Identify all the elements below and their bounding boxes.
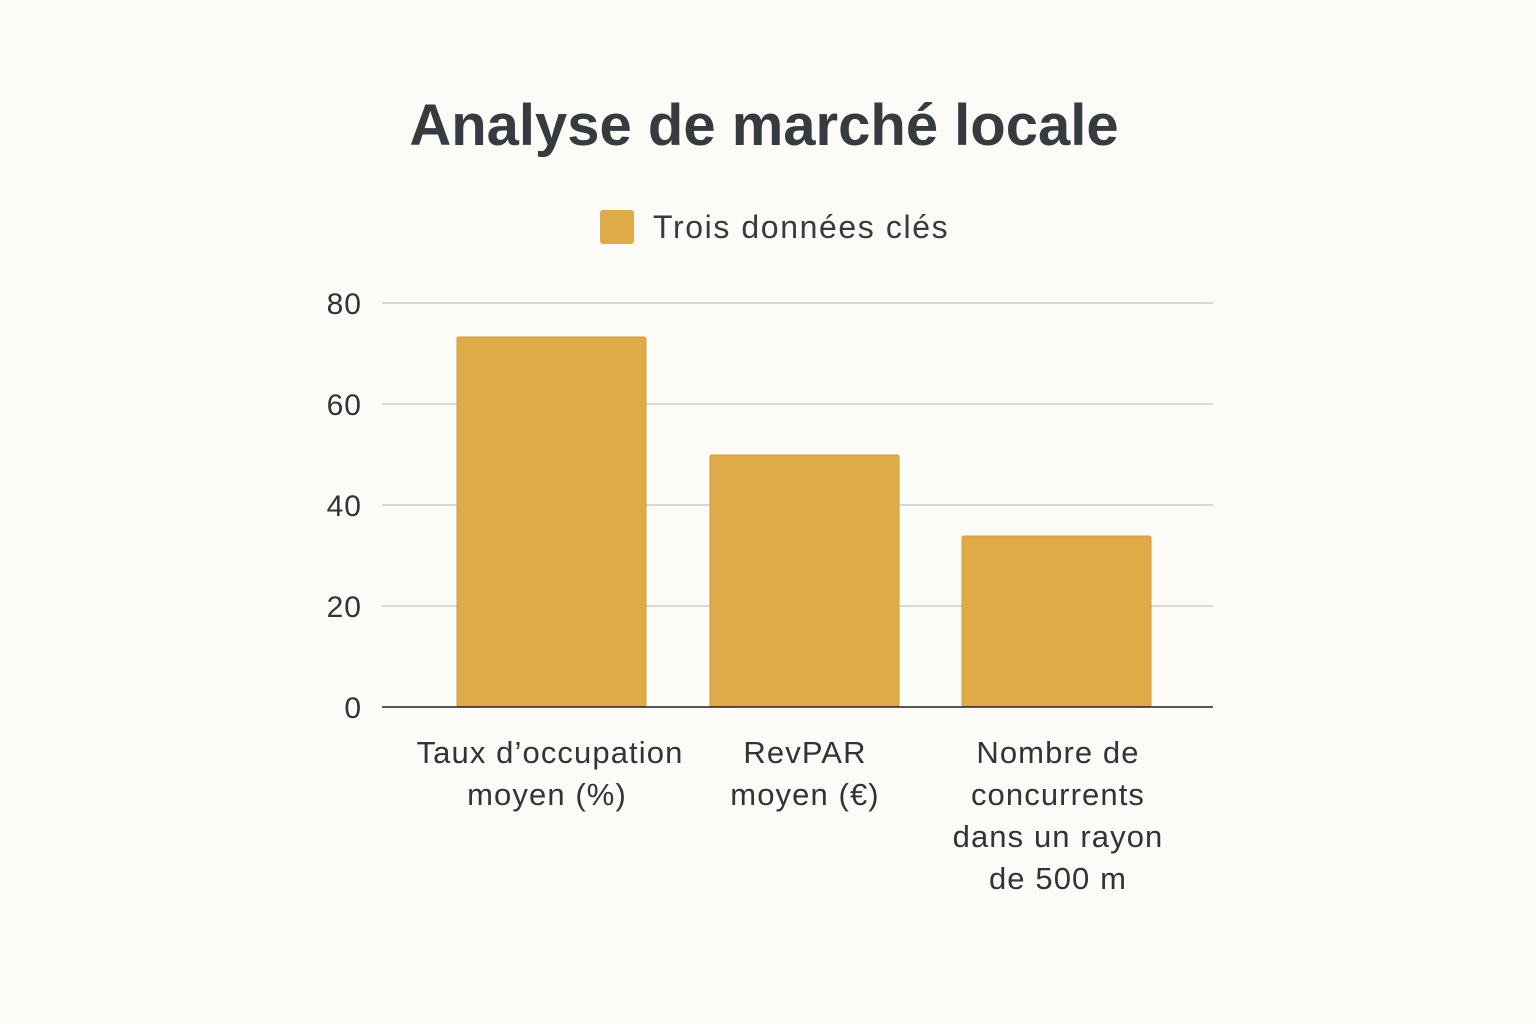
legend swatch (600, 210, 634, 244)
legend label: Trois données clés (653, 209, 949, 245)
x-axis labels: Nombre de (976, 735, 1140, 770)
y-axis labels (327, 288, 362, 725)
bars (457, 337, 1151, 707)
x-axis labels: moyen (€) (730, 777, 880, 812)
x-axis labels: Taux d’occupation (417, 735, 683, 770)
y-axis labels: 20 (327, 591, 362, 624)
x-axis labels: concurrents (971, 777, 1145, 812)
x-axis labels (417, 735, 1163, 896)
y-axis labels: 40 (327, 490, 362, 523)
y-axis labels: 0 (344, 692, 362, 725)
legend (600, 209, 949, 245)
title: Analyse de marché locale (409, 93, 1119, 158)
y-axis labels: 80 (327, 288, 362, 321)
y-axis labels: 60 (327, 389, 362, 422)
x-axis labels: dans un rayon (953, 819, 1163, 854)
x-axis labels: de 500 m (989, 861, 1127, 896)
x-axis labels: moyen (%) (467, 777, 627, 812)
x-axis labels: RevPAR (743, 735, 867, 770)
